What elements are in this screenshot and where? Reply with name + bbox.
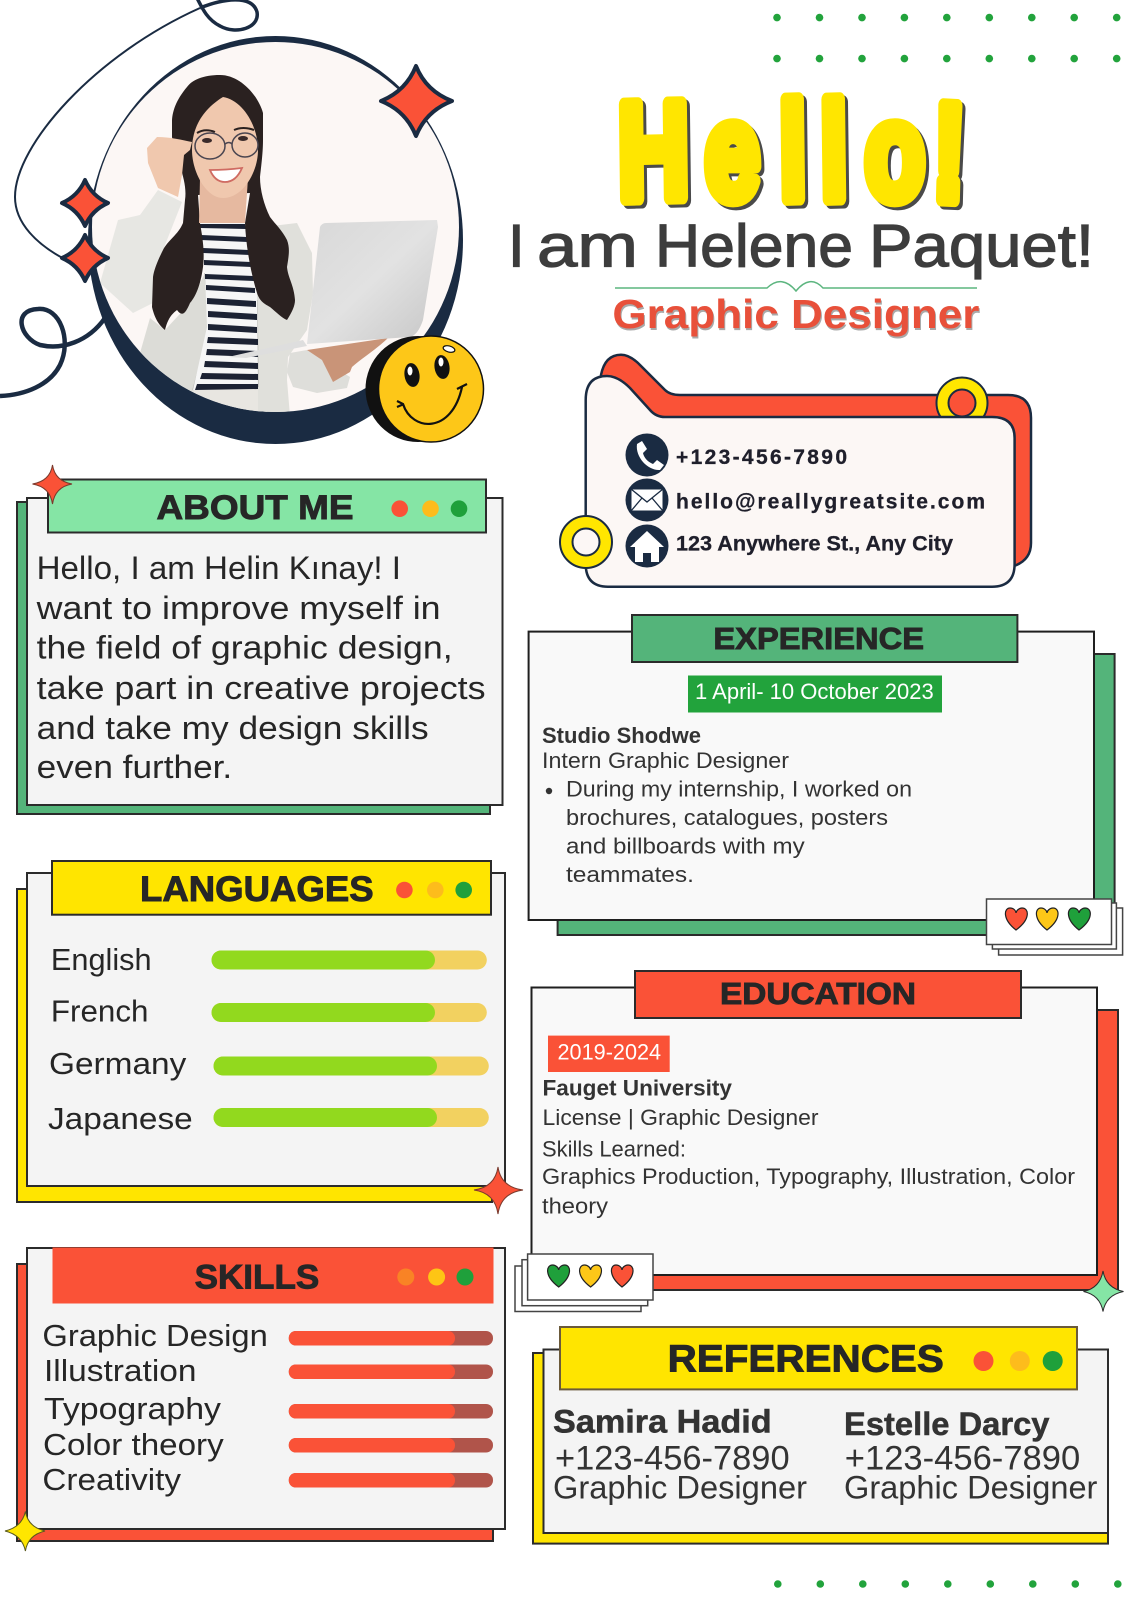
star <box>32 465 72 504</box>
laptop base <box>228 340 307 358</box>
forearm sleeve <box>287 350 350 393</box>
hair <box>152 75 295 330</box>
thin swirl line <box>15 8 200 263</box>
panel: education <box>515 971 1124 1312</box>
name heading: Helene <box>655 213 853 280</box>
decorative divider <box>615 282 977 291</box>
heart cards <box>986 899 1123 955</box>
degree: License | Graphic Designer <box>542 1105 818 1130</box>
address: 123 Anywhere St., Any City <box>676 533 953 556</box>
window dots <box>396 882 472 898</box>
card front <box>586 376 1015 587</box>
reference: Samira Hadid: Samira Hadid <box>553 1404 772 1440</box>
date badge: 1 April- 10 October 2023 <box>695 679 934 704</box>
panel: skills <box>5 1248 505 1551</box>
panel: references <box>533 1327 1108 1544</box>
header bar <box>52 861 491 915</box>
reference: Estelle Darcy <box>844 1406 1098 1506</box>
header bar <box>52 1248 494 1304</box>
panel: languages <box>17 861 523 1214</box>
language bars <box>212 950 489 1127</box>
face <box>192 97 258 198</box>
smile <box>210 168 242 182</box>
role: Intern Graphic Designer <box>542 748 789 773</box>
email: hello@reallygreatsite.com <box>676 490 985 514</box>
raised sleeve <box>100 190 182 313</box>
holding hand <box>307 338 388 382</box>
language labels: Germany <box>49 1046 187 1081</box>
bullet description: teammates. <box>566 862 694 887</box>
date badge <box>688 676 942 712</box>
icon: phone <box>626 434 668 476</box>
skill bars <box>289 1331 493 1488</box>
glasses <box>195 133 258 159</box>
striped shirt <box>193 273 258 390</box>
about text: even further. <box>37 749 232 785</box>
heading: EDUCATION <box>720 976 916 1011</box>
lapel line <box>193 273 258 390</box>
language labels: French <box>51 993 148 1028</box>
language labels <box>48 942 193 1136</box>
panel: contact card <box>560 355 1031 587</box>
reference: Samira Hadid <box>553 1404 807 1506</box>
small red star lower <box>62 235 108 281</box>
name heading: Paquet! <box>869 213 1094 280</box>
heart cards <box>515 1254 653 1312</box>
star <box>1084 1271 1124 1312</box>
panel: about me <box>17 465 502 814</box>
window dots <box>974 1351 1063 1371</box>
skill labels: Typography <box>44 1391 222 1426</box>
reference: Samira Hadid: +123-456-7890 <box>555 1440 790 1478</box>
date badge <box>548 1036 670 1072</box>
heading: LANGUAGES <box>140 870 374 909</box>
header bar <box>48 480 486 532</box>
heading: REFERENCES <box>668 1338 944 1380</box>
eyes <box>202 136 248 143</box>
name heading: am <box>537 213 638 280</box>
smiley sticker <box>366 336 484 442</box>
skills learned: theory <box>542 1194 608 1219</box>
reference: Estelle Darcy: +123-456-7890 <box>845 1440 1080 1478</box>
raised hand <box>147 137 192 197</box>
heading: ABOUT ME <box>156 489 354 527</box>
company: Studio Shodwe <box>542 723 701 748</box>
panel: experience <box>529 615 1123 955</box>
reference: Samira Hadid: Graphic Designer <box>553 1470 807 1506</box>
date badge: 2019-2024 <box>558 1040 661 1064</box>
bullet description: and billboards with my <box>566 834 805 858</box>
skills learned: Skills Learned: <box>542 1136 686 1162</box>
school: Fauget University <box>542 1076 733 1100</box>
skills learned <box>542 1136 1075 1219</box>
heading: EXPERIENCE <box>713 621 924 656</box>
header bar <box>635 971 1021 1018</box>
blazer right panel <box>255 223 313 416</box>
header bar <box>560 1327 1077 1389</box>
skill labels: Graphic Design <box>42 1318 268 1353</box>
ring left <box>560 516 612 568</box>
about text: Hello, I am Helin Kınay! I <box>37 550 401 586</box>
star <box>474 1167 523 1214</box>
skill labels <box>42 1318 268 1497</box>
decorative green dots bottom <box>774 1580 1122 1588</box>
blazer left panel <box>140 274 207 392</box>
window dots <box>397 1268 474 1286</box>
title Hello: Hello! <box>617 74 968 230</box>
about text: want to improve myself in <box>35 590 441 626</box>
about text: the field of graphic design, <box>37 630 453 666</box>
lower swirl loop <box>0 309 105 396</box>
skill labels: Creativity <box>42 1462 182 1497</box>
bullet description: brochures, catalogues, posters <box>566 805 888 830</box>
card back red <box>600 355 1031 566</box>
icon: house <box>626 524 668 568</box>
star <box>5 1512 45 1551</box>
top swirl loop <box>197 0 257 30</box>
skills learned: Graphics Production, Typography, Illustration, Color <box>542 1164 1075 1189</box>
window dots <box>391 500 467 517</box>
bullet description <box>546 777 912 887</box>
dark ring crescent <box>88 36 463 444</box>
brows <box>197 128 254 133</box>
language labels: English <box>51 942 152 977</box>
ring top <box>936 378 988 428</box>
name heading: I <box>508 213 525 280</box>
heading: SKILLS <box>195 1259 319 1297</box>
portrait medallion <box>0 0 484 444</box>
phone number: +123-456-7890 <box>676 446 847 469</box>
about text <box>35 550 486 785</box>
reference: Estelle Darcy: Estelle Darcy <box>844 1406 1050 1442</box>
skill labels: Illustration <box>44 1353 196 1388</box>
large red star <box>381 66 452 136</box>
laptop screen <box>307 220 438 344</box>
about text: and take my design skills <box>37 710 429 746</box>
decorative green dots top <box>773 14 1120 62</box>
header bar <box>632 615 1017 662</box>
role subtitle: Graphic Designer <box>612 291 979 337</box>
about text: take part in creative projects <box>37 670 486 706</box>
neck <box>199 178 248 223</box>
icon: envelope <box>626 478 668 522</box>
woman with laptop photo <box>100 75 438 416</box>
bullet description: During my internship, I worked on <box>566 777 912 802</box>
language labels: Japanese <box>48 1101 193 1136</box>
trousers <box>190 389 267 412</box>
reference: Estelle Darcy: Graphic Designer <box>844 1470 1098 1506</box>
skill labels: Color theory <box>43 1427 224 1462</box>
cream circle <box>92 42 459 412</box>
small red star upper <box>62 180 108 226</box>
